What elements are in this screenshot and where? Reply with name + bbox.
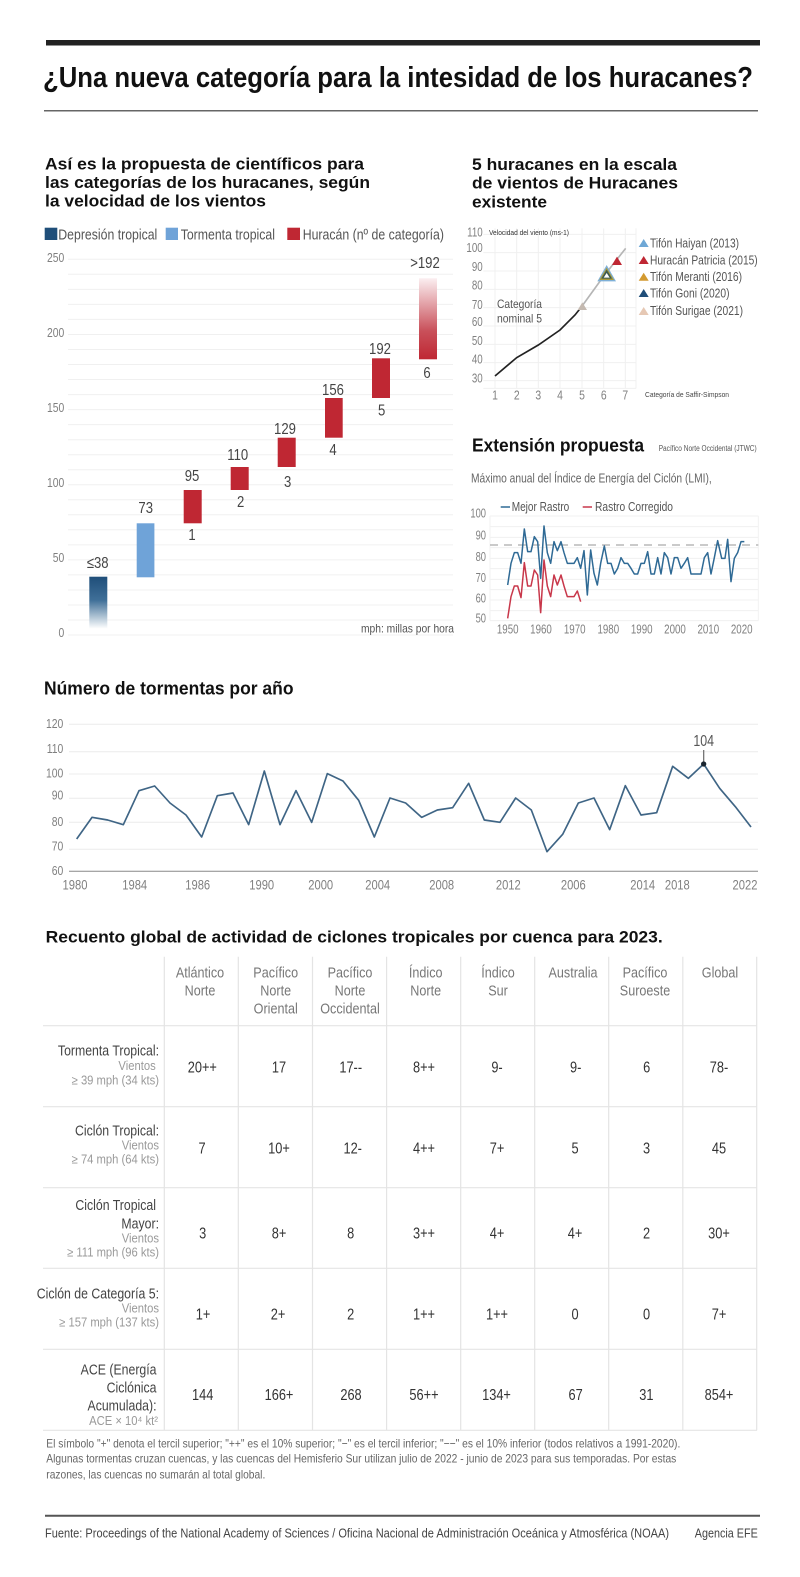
row: ciclón de categoría 5: 1++: [486, 1306, 508, 1324]
unit note: mph: millas por hora: [361, 622, 454, 636]
bar value labels: 5: [378, 403, 385, 420]
table header: Atlántico: [176, 964, 224, 981]
bar value labels: 110: [227, 447, 248, 464]
row: tormenta tropical: 17: [272, 1059, 286, 1077]
row: tormenta tropical: 8++: [413, 1059, 435, 1077]
bar value labels: 6: [423, 365, 431, 382]
heading: 5 huracanes: existente: [472, 193, 547, 212]
row: ciclón tropical: 4++: [413, 1140, 435, 1158]
legend: categorías: [45, 226, 444, 244]
row: ciclón tropical: 5: [571, 1140, 579, 1158]
row: ACE: 67: [568, 1387, 583, 1404]
row: tormenta tropical: 9-: [570, 1059, 582, 1077]
chart: escala Saffir-Simpson: 100: [466, 242, 483, 255]
legend: rastro: Rastro Corregido: [595, 499, 673, 514]
row: tormenta tropical: 78-: [710, 1059, 728, 1077]
heading: 5 huracanes: 5 huracanes en la escala: [472, 155, 678, 174]
row: ciclón tropical: 12-: [343, 1140, 362, 1158]
row: ACE: Ciclónica: [107, 1380, 157, 1396]
row: ciclón tropical: 7: [198, 1140, 206, 1158]
row: ciclón tropical mayor: 8: [347, 1225, 354, 1243]
bars: huracán categorías 1 a 5: [184, 358, 390, 523]
chart: máximo anual LMI: 90: [476, 529, 486, 543]
bar value labels: 73: [138, 500, 153, 517]
chart: máximo anual LMI: 60: [476, 592, 486, 606]
row: ciclón tropical mayor: 4+: [568, 1225, 582, 1243]
chart: escala Saffir-Simpson: 7: [622, 388, 628, 403]
table header: Pacífico: [623, 964, 668, 981]
row: tormenta tropical: [58, 1043, 728, 1087]
row: ACE: Acumulada):: [88, 1398, 156, 1414]
table header: Norte: [335, 981, 366, 999]
chart: máximo anual LMI: 2010: [697, 623, 719, 637]
line: rastro corregido: [508, 560, 581, 618]
bar value labels: 4: [329, 442, 337, 459]
row: ciclón de categoría 5: 0: [643, 1306, 650, 1324]
chart: tormentas por año: 2014: [630, 877, 655, 893]
chart: tormentas por año: 2000: [308, 877, 333, 893]
table note: El símbolo "+" denota el tercil superior; "++" es el 10% superior; "−" es el tercil inferior; "−−" es el 10% inferior (todos relativos a 1991-2020).: [46, 1436, 680, 1450]
bar value labels: >192: [410, 255, 440, 272]
row: ciclón de categoría 5: 0: [571, 1306, 579, 1324]
row: ACE: 31: [639, 1387, 654, 1404]
chart: tormentas por año: [46, 717, 758, 893]
line: mejor rastro: [508, 526, 744, 595]
table note: Algunas tormentas cruzan cuencas, y las cuencas del Hemisferio Sur utilizan julio de 2022 - junio de 2023 para sus temporadas. Por estas: [46, 1452, 676, 1466]
bar value labels: [87, 255, 440, 572]
row: ACE: [81, 1361, 733, 1428]
table header: Pacífico: [253, 964, 298, 981]
row: ACE: 144: [192, 1387, 213, 1404]
chart: tormentas por año: 110: [47, 742, 64, 756]
bar value labels: 156: [322, 382, 344, 399]
chart: velocidad por categoría: 50: [53, 551, 65, 565]
chart: máximo anual LMI: 2000: [664, 623, 686, 637]
chart: escala Saffir-Simpson: [466, 226, 758, 403]
chart: máximo anual LMI: 50: [476, 612, 486, 626]
row: ACE: ACE (Energía: [81, 1361, 157, 1378]
line: tormentas: [77, 750, 751, 852]
chart: tormentas por año: 1986: [185, 877, 210, 893]
heading: 5 huracanes: de vientos de Huracanes: [472, 174, 678, 193]
table note: [46, 1436, 680, 1481]
table header: Pacífico: [328, 964, 373, 981]
row: ciclón tropical mayor: Mayor:: [121, 1215, 159, 1232]
table note: razones, las cuencas no sumarán al total global.: [46, 1467, 265, 1481]
heading: número de tormentas: Número de tormentas por año: [44, 678, 294, 698]
chart: tormentas por año: 90: [52, 788, 64, 803]
chart: escala Saffir-Simpson: 110: [467, 226, 483, 240]
row: ACE: 854+: [705, 1387, 733, 1404]
row: ACE: 166+: [265, 1387, 293, 1404]
row: ciclón tropical: Ciclón Tropical:: [75, 1123, 159, 1139]
axis title: velocidad: Velocidad del viento (ms-1): [489, 228, 569, 237]
legend: rastro: [501, 499, 673, 514]
table header: Sur: [488, 981, 508, 999]
note: Pacífico Norte Occidental: Pacífico Norte Occidental (JTWC): [659, 444, 757, 453]
heading: 5 huracanes: [472, 155, 678, 212]
annotation: categoría nominal 5: Categoría: [497, 297, 542, 311]
row: ciclón de categoría 5: 2: [347, 1306, 354, 1324]
chart: máximo anual LMI: 100: [470, 507, 486, 521]
table header: Norte: [410, 981, 441, 999]
bar value labels: 2: [237, 494, 244, 511]
legend: categorías: Tormenta tropical: [181, 226, 275, 244]
bar value labels: ≤38: [87, 555, 109, 572]
row: ciclón de categoría 5: 7+: [712, 1306, 726, 1324]
chart: máximo anual LMI: 1960: [530, 623, 552, 637]
header bar: [46, 40, 760, 46]
table header: [176, 964, 738, 1017]
bar value labels: 192: [369, 341, 391, 358]
bar value labels: 1: [188, 527, 196, 544]
row: ciclón tropical mayor: 2: [643, 1225, 650, 1243]
row: ciclón tropical mayor: 30+: [708, 1225, 730, 1243]
row: tormenta tropical: 6: [643, 1059, 650, 1077]
subtitle: LMI: Máximo anual del Índice de Energía del Ciclón (LMI),: [471, 470, 712, 485]
row: ciclón de categoría 5: 2+: [271, 1306, 285, 1324]
chart: escala Saffir-Simpson: 30: [472, 372, 483, 386]
row: ciclón de categoría 5: [37, 1285, 726, 1330]
legend: huracanes: [639, 236, 758, 318]
heading: propuesta: Así es la propuesta de científicos para: [45, 154, 365, 173]
table header: Occidental: [320, 999, 380, 1017]
chart: tormentas por año: 120: [46, 717, 64, 731]
chart: escala Saffir-Simpson: 90: [472, 261, 483, 274]
chart: escala Saffir-Simpson: 5: [579, 388, 585, 403]
row: ciclón de categoría 5: Vientos: [122, 1301, 159, 1316]
row: tormenta tropical: Vientos: [118, 1058, 156, 1073]
bar value labels: 3: [284, 474, 291, 491]
chart: tormentas por año: 2008: [429, 877, 454, 893]
bar: tormenta tropical: [137, 523, 154, 577]
chart: tormentas por año: 2006: [561, 877, 586, 893]
row: tormenta tropical: 20++: [188, 1059, 217, 1077]
peak label: 104: [693, 732, 714, 749]
axis title: categoría: Categoría de Saffir-Simpson: [645, 390, 729, 399]
row: ciclón tropical: 3: [643, 1140, 650, 1158]
chart: velocidad por categoría: 150: [47, 401, 65, 415]
row: tormenta tropical: ≥ 39 mph (34 kts): [72, 1073, 159, 1087]
legend: huracanes: Tifón Goni (2020): [650, 286, 730, 300]
chart: máximo anual LMI: 2020: [731, 623, 753, 637]
legend: rastro: Mejor Rastro: [512, 499, 569, 514]
row: tormenta tropical: Tormenta Tropical:: [58, 1043, 159, 1059]
credit: Agencia EFE: [695, 1527, 758, 1541]
table header: Norte: [260, 981, 291, 999]
heading: extensión propuesta: Extensión propuesta: [472, 436, 645, 456]
chart: escala Saffir-Simpson: 60: [472, 316, 483, 329]
chart: velocidad por categoría: [47, 251, 454, 640]
chart: tormentas por año: 100: [46, 766, 64, 781]
chart: escala Saffir-Simpson: 2: [514, 388, 520, 403]
chart: tormentas por año: 70: [52, 839, 64, 854]
chart: máximo anual LMI: 1990: [631, 623, 653, 637]
table header: Suroeste: [620, 981, 670, 999]
chart: escala Saffir-Simpson: 4: [557, 388, 563, 403]
row: tormenta tropical: 17--: [339, 1059, 362, 1077]
row: ciclón tropical mayor: Ciclón Tropical: [75, 1197, 156, 1213]
annotation: categoría nominal 5: [497, 297, 542, 326]
curve and storm markers: [495, 248, 626, 376]
heading: propuesta: las categorías de los huracanes, según: [45, 173, 370, 192]
bar: huracán categoría 6: [419, 278, 437, 359]
row: ciclón tropical mayor: 3++: [413, 1225, 435, 1243]
annotation: categoría nominal 5: nominal 5: [497, 312, 542, 326]
chart: tormentas por año: 2018: [665, 877, 690, 893]
heading: propuesta: [45, 154, 370, 211]
legend: categorías: Depresión tropical: [58, 226, 157, 244]
row: ciclón tropical: ≥ 74 mph (64 kts): [72, 1152, 159, 1166]
row: ciclón tropical: [72, 1123, 726, 1166]
legend: huracanes: Huracán Patricia (2015): [650, 252, 758, 268]
row: ciclón de categoría 5: ≥ 157 mph (137 kts): [59, 1315, 159, 1330]
row: ciclón tropical mayor: Vientos: [122, 1231, 159, 1245]
table header: Global: [702, 964, 738, 981]
chart: velocidad por categoría: 100: [47, 476, 65, 490]
chart: máximo anual LMI: [470, 507, 758, 637]
chart: tormentas por año: 60: [52, 864, 64, 878]
chart: tormentas por año: 2012: [496, 877, 521, 893]
chart: máximo anual LMI: 80: [476, 551, 486, 564]
chart: tormentas por año: 1984: [122, 877, 147, 893]
heading: propuesta: la velocidad de los vientos: [45, 192, 266, 211]
row: ciclón de categoría 5: 1++: [413, 1306, 435, 1324]
row: ACE: 134+: [482, 1387, 511, 1404]
chart: escala Saffir-Simpson: 50: [472, 335, 483, 348]
table header: Índico: [481, 964, 515, 981]
row: ciclón tropical: 7+: [490, 1140, 504, 1158]
table: actividad por cuenca: [37, 957, 757, 1430]
legend: categorías: Huracán (nº de categoría): [303, 226, 444, 244]
row: ciclón tropical mayor: [67, 1197, 730, 1260]
chart: escala Saffir-Simpson: 3: [535, 388, 542, 403]
row: ACE: 56++: [409, 1387, 439, 1404]
chart: velocidad por categoría: 200: [47, 326, 65, 340]
row: ACE: ACE × 10⁴ kt²: [89, 1413, 158, 1428]
table header: Australia: [548, 964, 598, 981]
row: tormenta tropical: 9-: [491, 1059, 503, 1077]
row: ciclón de categoría 5: Ciclón de Categoría 5:: [37, 1285, 159, 1302]
bar: depresión tropical: [89, 577, 107, 629]
row: ciclón tropical: Vientos: [122, 1138, 159, 1152]
row: ciclón tropical: 45: [712, 1140, 726, 1158]
legend: huracanes: Tifón Meranti (2016): [650, 269, 742, 284]
chart: velocidad por categoría: 250: [47, 251, 65, 265]
bar value labels: 95: [185, 468, 199, 485]
legend: huracanes: Tifón Surigae (2021): [650, 303, 743, 318]
chart: escala Saffir-Simpson: 6: [601, 388, 607, 403]
legend: huracanes: Tifón Haiyan (2013): [650, 236, 739, 250]
chart: tormentas por año: 2004: [365, 877, 390, 893]
chart: máximo anual LMI: 1980: [597, 623, 619, 637]
row: ciclón tropical mayor: 3: [199, 1225, 206, 1243]
row: ciclón tropical: 10+: [268, 1140, 290, 1158]
chart: tormentas por año: 80: [52, 815, 64, 829]
chart: máximo anual LMI: 70: [476, 572, 486, 585]
chart: escala Saffir-Simpson: 80: [472, 279, 483, 293]
source: Fuente: Proceedings of the National Academy of Sciences / Oficina Nacional de Administración Oceánica y Atmosférica (NOAA): [45, 1527, 669, 1541]
table header: Oriental: [254, 999, 298, 1017]
row: ciclón de categoría 5: 1+: [196, 1306, 210, 1324]
bar value labels: 129: [274, 421, 296, 438]
chart: tormentas por año: 1990: [249, 877, 274, 893]
chart: velocidad por categoría: 0: [59, 626, 65, 640]
chart: escala Saffir-Simpson: 40: [472, 353, 483, 367]
table header: Norte: [185, 981, 216, 999]
chart: máximo anual LMI: 1970: [564, 623, 586, 637]
chart: escala Saffir-Simpson: 1: [492, 388, 498, 403]
row: ciclón tropical mayor: ≥ 111 mph (96 kts): [67, 1245, 159, 1260]
row: ACE: 268: [340, 1387, 362, 1404]
chart: máximo anual LMI: 1950: [497, 623, 519, 637]
chart: tormentas por año: 2022: [733, 877, 758, 893]
heading: recuento global: Recuento global de actividad de ciclones tropicales por cuenca para 2023.: [46, 928, 663, 946]
table header: Índico: [409, 964, 443, 981]
row: ciclón tropical mayor: 8+: [272, 1225, 286, 1243]
chart: escala Saffir-Simpson: 70: [472, 299, 483, 312]
row: ciclón tropical mayor: 4+: [490, 1225, 504, 1243]
chart: tormentas por año: 1980: [63, 877, 88, 893]
